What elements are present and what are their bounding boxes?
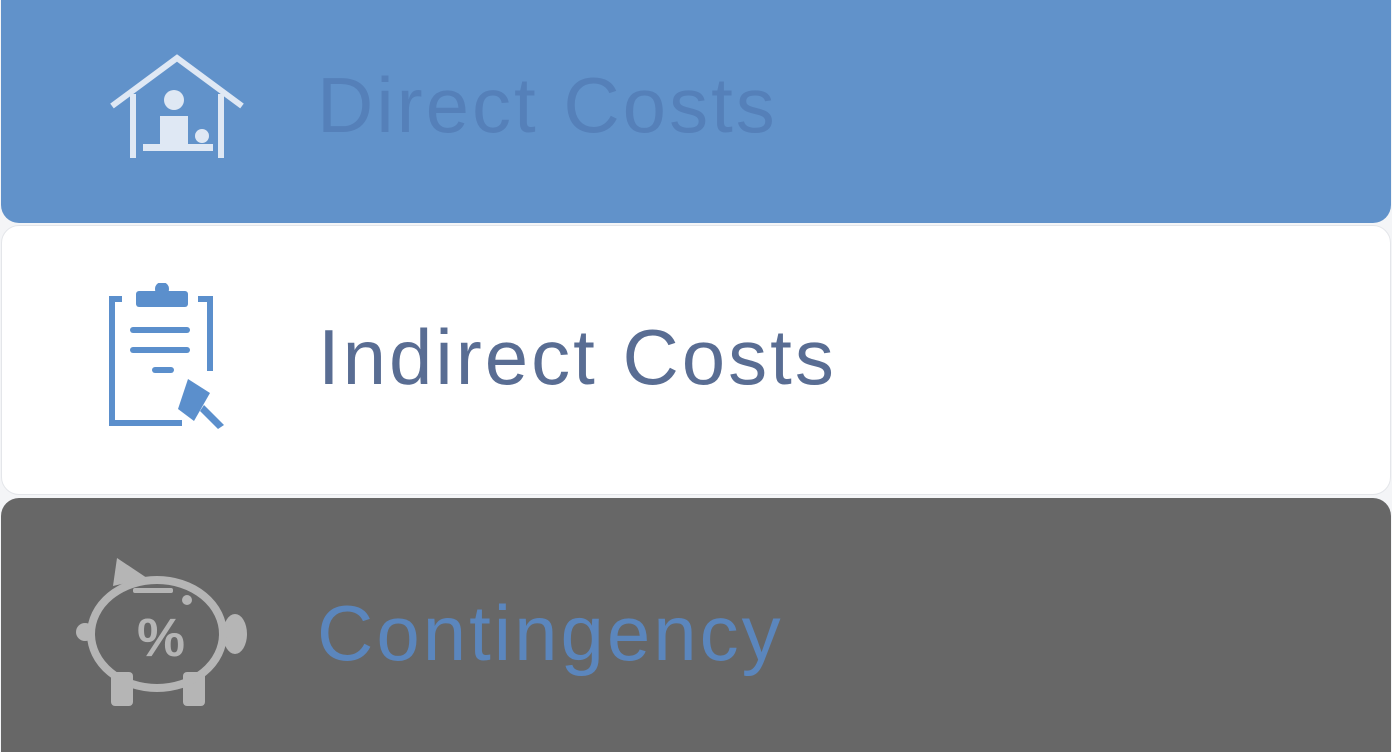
panel: indirect costs	[1, 225, 1391, 495]
icon: piggy bank with percent	[76, 558, 247, 706]
heading: Direct Costs: Direct Costs	[317, 61, 778, 149]
panel: direct costs	[1, 0, 1391, 223]
icon: house with person	[110, 54, 244, 158]
panel: contingency	[1, 498, 1391, 752]
icon: piggy bank with percent: %	[137, 608, 185, 668]
heading: Contingency: Contingency	[317, 589, 784, 677]
icon: clipboard with shovel	[109, 283, 224, 429]
heading: Indirect Costs: Indirect Costs	[318, 313, 837, 401]
